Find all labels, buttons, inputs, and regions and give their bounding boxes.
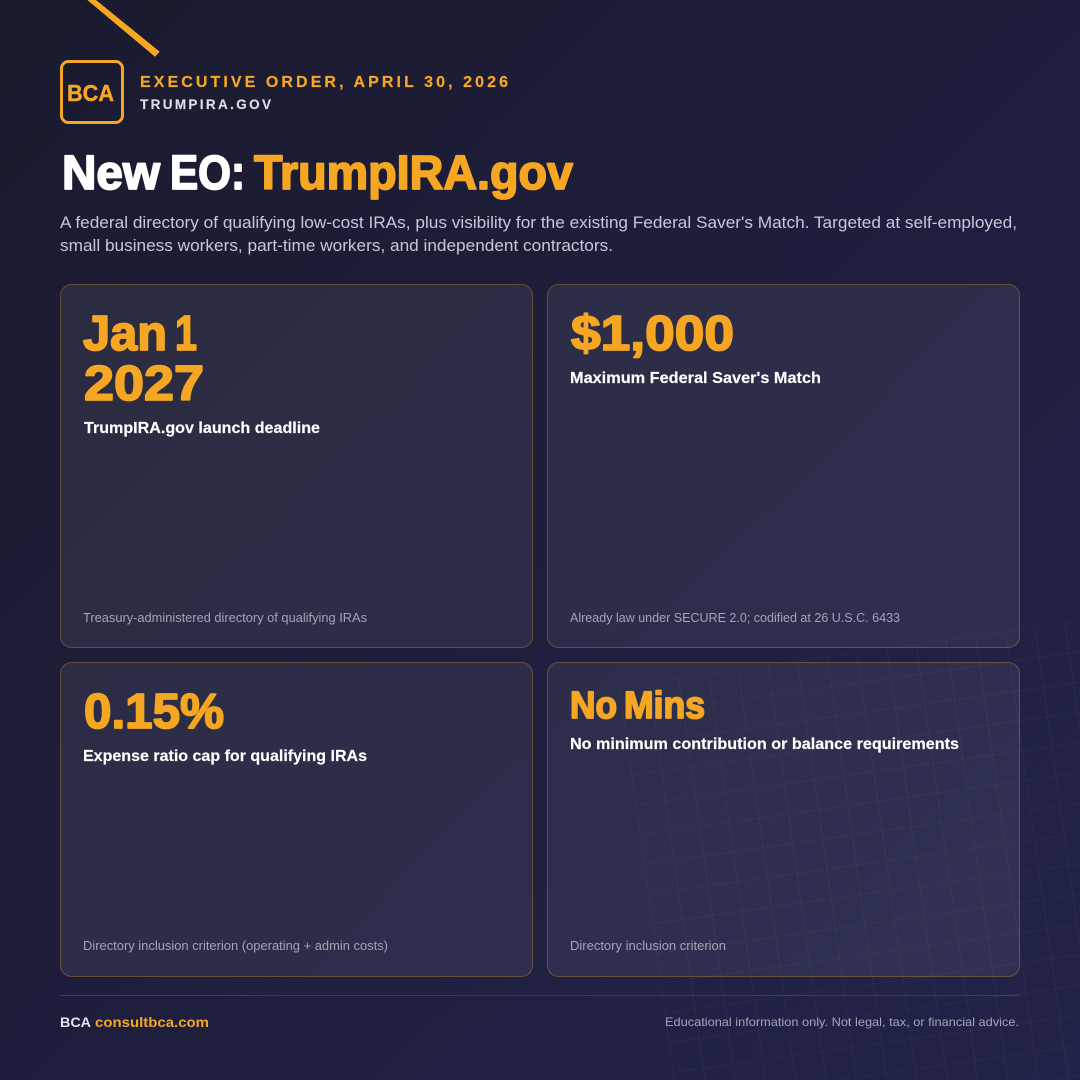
footer brand: consultbca.com [95,1014,209,1030]
panel: expense ratio cap [60,662,532,976]
subtitle: small business workers, part-time workers, and independent contractors. [60,237,613,255]
label: Expense ratio cap for qualifying IRAs [83,748,367,765]
stat: Jan 1 2027: 1 [175,307,197,361]
subtitle: A federal directory of qualifying low-cost IRAs, plus visibility for the existing Federal Saver's Match. Targeted at self-employed, [60,214,1017,232]
title [62,147,573,200]
stat: No Mins [570,685,705,727]
accent diagonal line [87,0,160,57]
footer brand: BCA [60,1014,91,1030]
logo badge: BCA [67,80,114,106]
stat: No Mins: Mins [624,685,705,727]
stat: Jan 1 2027: 2027 [84,357,204,411]
footer disclaimer: Educational information only. Not legal, tax, or financial advice. [665,1015,1019,1029]
label: Maximum Federal Saver's Match [570,370,821,387]
stat: Jan 1 2027 [83,307,204,411]
panel: launch deadline [60,284,532,648]
panel: no minimums [548,662,1020,976]
title: TrumpIRA.gov [254,147,573,200]
label: TrumpIRA.gov launch deadline [84,420,320,437]
stat: Jan 1 2027: Jan [83,307,167,361]
eyebrow: site name: TRUMPIRA.GOV [140,97,271,112]
footnote: Treasury-administered directory of qualifying IRAs [83,611,367,625]
title: EO: [170,147,245,200]
footnote: Directory inclusion criterion [570,939,726,953]
stat: No Mins: No [570,685,617,727]
header: logo and eyebrow text [62,62,508,122]
stat: 0.15%: 0.15% [84,685,224,739]
subtitle [60,214,1017,255]
label: No minimum contribution or balance requirements [570,736,959,753]
stat: $1,000: $1,000 [571,307,734,361]
footnote: Directory inclusion criterion (operating + admin costs) [83,939,388,953]
panel: federal saver's match [548,284,1020,648]
logo badge [62,62,122,122]
title: New [62,147,161,200]
eyebrow: executive order date: EXECUTIVE ORDER, APRIL 30, 2026 [140,74,508,91]
footnote: Already law under SECURE 2.0; codified at 26 U.S.C. 6433 [570,611,900,625]
